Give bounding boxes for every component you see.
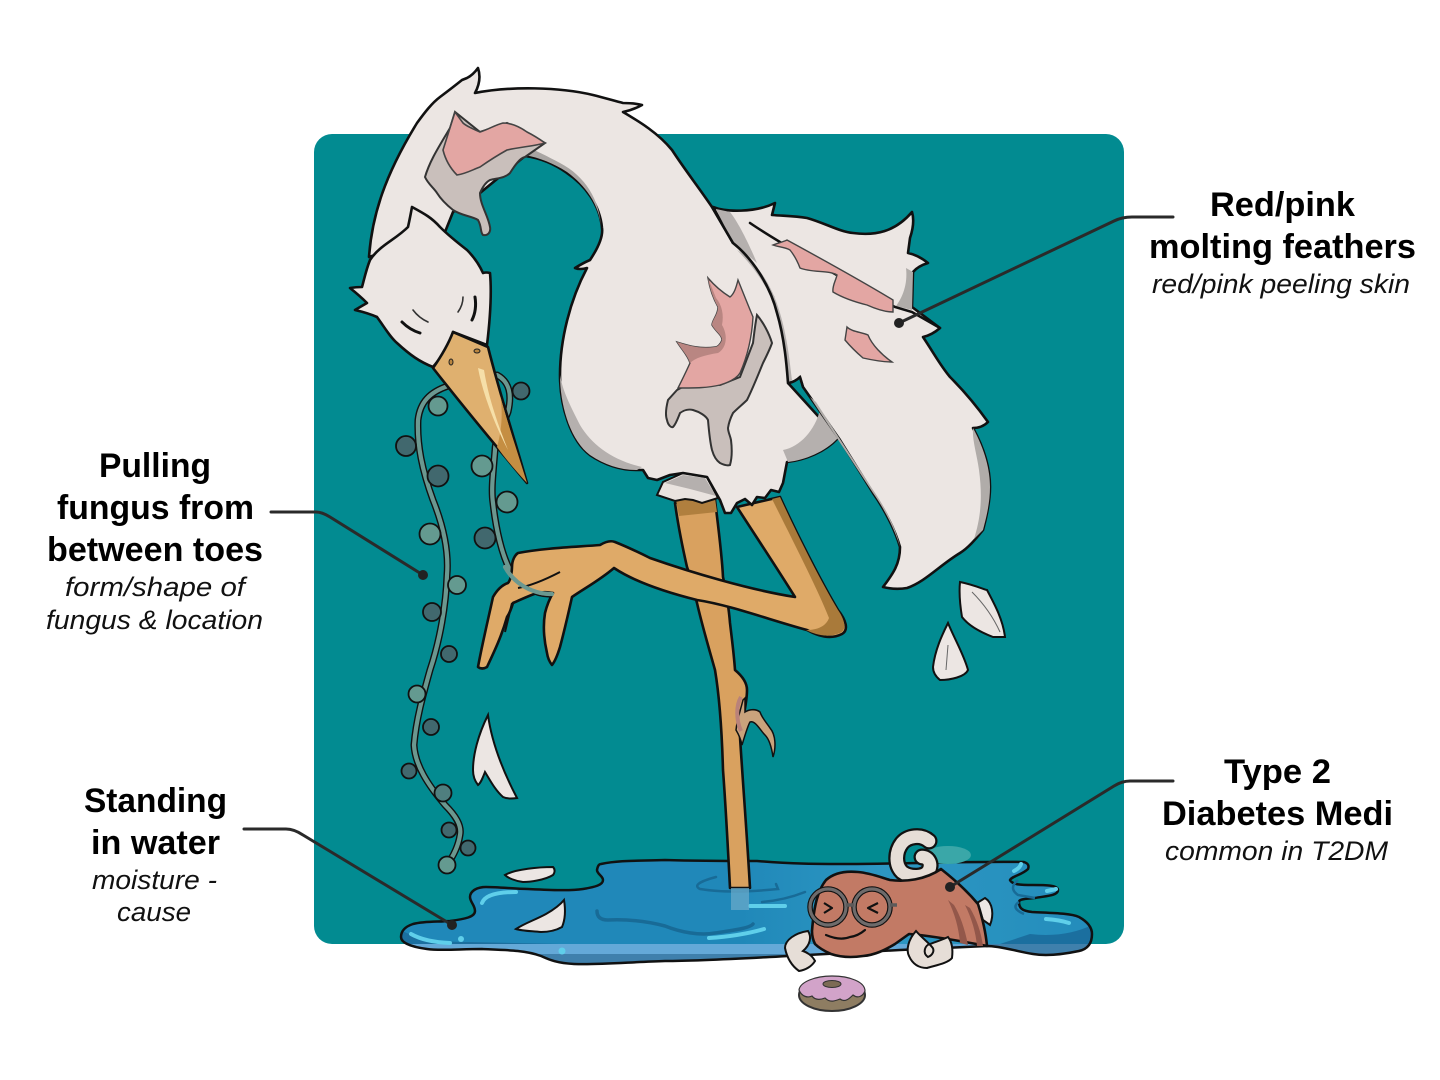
label: type 2 diabetes medi: Type 2 <box>1224 753 1331 791</box>
label: standing in water: moisture - <box>92 865 217 895</box>
wound: body <box>666 278 772 465</box>
stork wing <box>713 203 990 589</box>
label: standing in water: cause <box>117 897 191 927</box>
label: pulling fungus from between toes: fungus from <box>57 489 254 527</box>
fungus vine right strand <box>472 375 552 594</box>
fungus vine left strand <box>396 386 476 874</box>
label: pulling fungus from between toes: between toes <box>47 531 263 569</box>
falling feather left <box>473 715 517 798</box>
fungus vine strand over foot <box>505 567 552 594</box>
ghost vapour above medi <box>925 846 971 864</box>
body patch overlapping wing <box>690 207 803 400</box>
label: type 2 diabetes medi: Diabetes Medi <box>1162 795 1393 833</box>
label: pulling fungus from between toes <box>46 447 263 635</box>
label: pulling fungus from between toes: Pulling <box>99 447 211 485</box>
label: standing in water: Standing <box>84 782 227 820</box>
puddle of water <box>400 860 1100 968</box>
stork body and neck <box>369 68 838 513</box>
label: red/pink molting feathers: red/pink peeling skin <box>1152 269 1410 299</box>
leader: red/pink molting feathers <box>894 217 1173 328</box>
label: red/pink molting feathers: molting feathers <box>1149 228 1416 266</box>
teal panel <box>314 134 1124 944</box>
stork beak <box>433 332 527 483</box>
wound: neck <box>425 112 545 235</box>
standing leg <box>675 498 775 910</box>
falling feather right <box>960 582 1005 637</box>
label: standing in water: in water <box>91 824 220 862</box>
wound: wing upper <box>773 240 893 312</box>
label: red/pink molting feathers <box>1149 186 1416 299</box>
floating feather in water lower <box>516 900 565 932</box>
label: red/pink molting feathers: Red/pink <box>1210 186 1355 224</box>
bent leg and foot <box>478 497 846 668</box>
donut <box>799 976 865 1011</box>
label: standing in water <box>84 782 227 927</box>
label: type 2 diabetes medi: common in T2DM <box>1165 836 1389 866</box>
leader: type 2 diabetes medi <box>945 781 1173 892</box>
leader: pulling fungus <box>271 512 428 580</box>
wound: wing lower <box>845 327 892 362</box>
Type 2 Diabetes Medi creature <box>785 837 992 971</box>
stork head <box>350 207 491 367</box>
label: pulling fungus from between toes: fungus & location <box>46 605 263 635</box>
label: type 2 diabetes medi <box>1162 753 1393 866</box>
falling feather lower right <box>933 623 968 680</box>
label: pulling fungus from between toes: form/shape of <box>65 572 248 602</box>
leader: standing in water <box>244 829 457 930</box>
floating feather in water top <box>505 867 555 882</box>
